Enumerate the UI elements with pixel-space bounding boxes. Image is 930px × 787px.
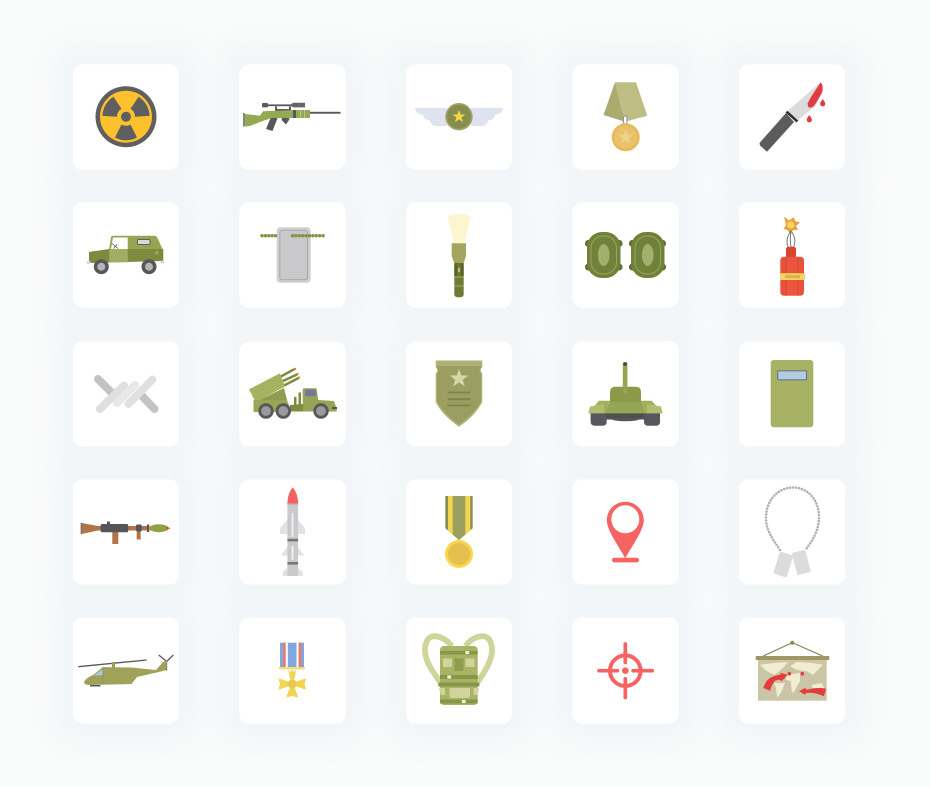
panel: tank card [572, 341, 679, 447]
panel: dog tags card [738, 479, 846, 585]
icon: dog tags [766, 488, 819, 578]
panel: shield badge card [406, 341, 512, 447]
panel: rocket launcher weapon card [72, 479, 180, 585]
icon: crosshair target [599, 644, 652, 698]
panel: crosshair card [572, 617, 679, 724]
panel: sniper rifle card [239, 64, 346, 170]
icon: attack helicopter [78, 655, 173, 686]
icon: striped ribbon medal [445, 496, 473, 568]
icon: bloody knife [760, 82, 825, 152]
panel: wings badge card [406, 64, 512, 170]
icon: gold medal with ribbon [604, 82, 647, 151]
icon: rocket launcher truck [249, 368, 337, 419]
icon: shield badge with star [436, 360, 482, 427]
panel: cross medal card [239, 617, 346, 724]
panel: plate carrier card [239, 202, 346, 308]
panel: radiation card [72, 64, 180, 170]
panel: striped medal card [406, 479, 512, 585]
icon: battle tank [588, 362, 663, 426]
panel: gold medal card [572, 64, 679, 170]
icon: cross medal [279, 643, 305, 696]
icon: winged star badge [415, 103, 503, 130]
panel: rocket launcher truck card [239, 341, 346, 447]
icon: sniper rifle [243, 103, 340, 131]
icon: shaving brush [448, 214, 471, 297]
panel: helicopter card [72, 617, 180, 724]
icon: plate with bead chain [262, 227, 324, 283]
icon: RPG launcher [81, 522, 171, 544]
icon: riot shield [771, 360, 813, 427]
icon: barbed wire [98, 379, 154, 409]
icon: military jeep [86, 236, 164, 274]
panel: brush card [406, 202, 512, 308]
icon: hanging war map [756, 641, 829, 701]
panel: barbed wire card [72, 341, 180, 447]
panel: backpack card [406, 617, 512, 724]
icon: radiation symbol [96, 86, 156, 147]
panel: missile card [239, 479, 346, 585]
icon: military backpack [425, 636, 492, 705]
panel: knife card [738, 64, 846, 170]
panel: dynamite card [738, 202, 846, 308]
icon: location pin [607, 502, 644, 562]
panel: jeep card [72, 202, 180, 308]
panel: knee pads card [572, 202, 679, 308]
icon: dynamite with spark [780, 216, 805, 296]
icon: knee pads [585, 232, 666, 278]
panel: war map card [738, 617, 846, 724]
panel: location pin card [572, 479, 679, 585]
icon: missile [280, 487, 305, 576]
panel: riot shield card [738, 341, 846, 447]
